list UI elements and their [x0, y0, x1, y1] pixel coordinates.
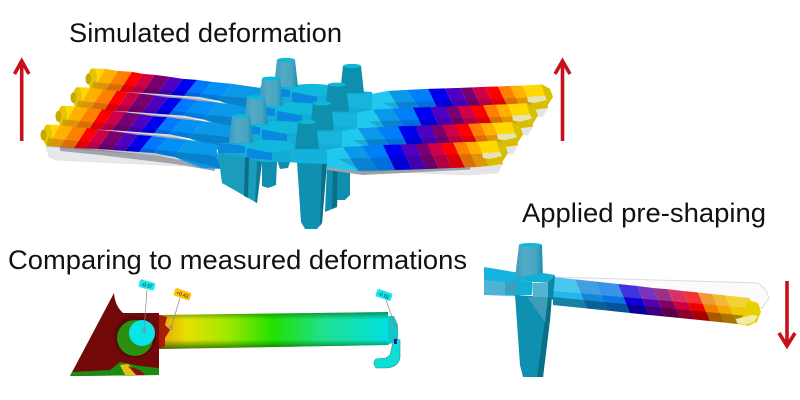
measurement chip: +0.43 — [173, 288, 192, 301]
left plate — [484, 267, 520, 296]
row 4 (front) — [40, 114, 508, 175]
row 3 — [56, 95, 523, 156]
arrow: upward deformation left — [14, 61, 29, 141]
measurement chip: -0.37: -0.37 — [140, 282, 153, 290]
measurement chip: +0.43: +0.43 — [175, 290, 189, 300]
pale hook — [736, 315, 758, 325]
arrow: downward pre-shaping — [779, 281, 795, 346]
hub backing — [218, 85, 372, 166]
measurement chip: -0.37 — [138, 279, 156, 291]
measurement chip: -0.52 — [375, 289, 393, 301]
fin legs behind — [262, 160, 350, 212]
undeformed ghost outline — [553, 277, 769, 310]
left front fin — [218, 153, 262, 203]
yellow tip — [738, 300, 761, 326]
arrow: upward deformation right — [555, 61, 570, 141]
diagram: applied pre-shaping single arm — [484, 243, 769, 377]
diagram: measured deformation colour map — [70, 279, 400, 376]
leader lines — [142, 290, 397, 333]
diagram: simulated deformation of four-arm part — [40, 58, 553, 229]
pillar — [515, 243, 555, 377]
title: simulated deformation: Simulated deformation — [69, 18, 342, 48]
dark red mounting bracket — [70, 293, 170, 376]
row 1 (back) — [86, 58, 553, 119]
translucent upper overlay — [553, 277, 750, 308]
hook end — [374, 316, 400, 368]
heading: applied pre-shaping: Applied pre-shaping — [522, 198, 766, 228]
heading: comparing to measured deformations: Comparing to measured deformations — [8, 245, 467, 275]
colour bands — [553, 277, 750, 325]
right front fin — [290, 150, 327, 229]
shaded lower overlay — [553, 297, 748, 325]
measurement chip: -0.52: -0.52 — [377, 291, 390, 301]
tube — [159, 312, 388, 349]
undeformed ghost outline — [46, 145, 501, 175]
row 2 — [70, 77, 538, 138]
